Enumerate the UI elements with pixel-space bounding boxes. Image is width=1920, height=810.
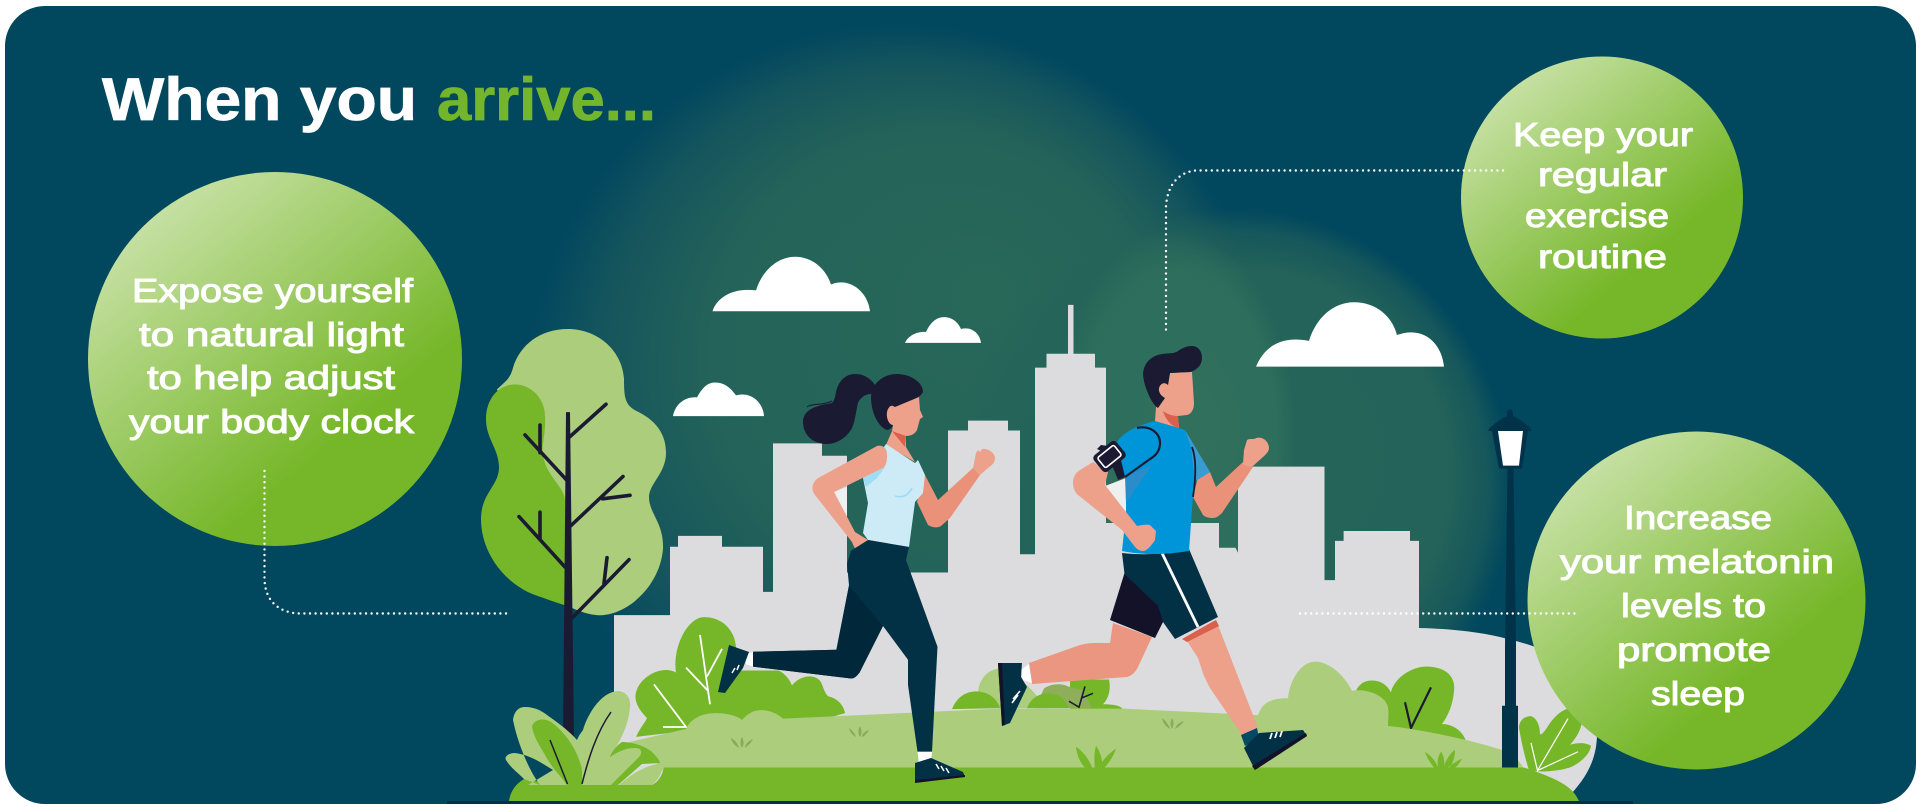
man shirt: [1112, 421, 1210, 554]
circle: melatonin: promote: [1617, 631, 1771, 668]
woman hair: [803, 374, 923, 444]
man hair: [1143, 346, 1202, 408]
woman far arm: [917, 468, 980, 527]
man near leg: [1187, 620, 1258, 735]
title: When you: [102, 66, 417, 133]
woman feet: [745, 652, 932, 764]
circle: melatonin: levels to: [1621, 587, 1766, 624]
title: [102, 66, 656, 133]
background glow: [561, 42, 1502, 630]
circle: natural light: to natural light: [139, 316, 404, 353]
circle: melatonin: sleep: [1651, 675, 1745, 712]
man fist: [1243, 438, 1269, 467]
woman neck and face: [886, 397, 923, 462]
woman arm gap: [834, 487, 847, 516]
right bottom leaves: [1519, 708, 1591, 772]
circle: exercise: regular: [1538, 156, 1667, 193]
circle: natural light: [88, 172, 462, 546]
man neck and face: [1155, 372, 1194, 428]
man armband and phone: [1092, 427, 1160, 480]
small bushes behind man: [952, 669, 1123, 709]
dotted connector: natural light: [264, 471, 507, 614]
woman fist: [973, 449, 995, 475]
circle: melatonin: Increase: [1624, 499, 1772, 536]
man near arm: [1073, 462, 1156, 551]
clouds: [673, 257, 1444, 416]
ground shadow line: [447, 801, 1633, 804]
title: arrive...: [437, 66, 656, 133]
runner: man: [998, 346, 1307, 770]
circle: exercise: routine: [1538, 238, 1667, 275]
bush behind runner: [635, 617, 845, 737]
man far leg: [1029, 623, 1152, 684]
circle: exercise: Keep your: [1513, 116, 1693, 153]
circle: natural light: Expose yourself: [132, 272, 414, 309]
hill: [626, 662, 1525, 771]
circle: melatonin: [1528, 432, 1866, 770]
circle: exercise: exercise: [1525, 197, 1669, 234]
man feet: [1241, 728, 1259, 746]
man far arm: [1193, 462, 1253, 518]
circle: natural light: to help adjust: [147, 359, 395, 396]
man white gap: [1105, 478, 1126, 513]
lamp post: [1489, 409, 1531, 780]
park scene background: [481, 257, 1597, 800]
dotted connector: melatonin: [1300, 612, 1580, 615]
ground: [509, 768, 1579, 801]
runner: woman: [718, 374, 995, 783]
circle: melatonin: your melatonin: [1560, 543, 1834, 580]
circle: natural light: your body clock: [129, 403, 415, 440]
city skyline: [614, 305, 1597, 800]
man shorts: [1110, 573, 1163, 638]
circle: exercise: [1461, 56, 1743, 338]
woman near arm: [812, 446, 887, 552]
tree: [481, 329, 666, 741]
woman leggings: [753, 540, 938, 752]
right bush: [1356, 667, 1466, 741]
front left bush: [505, 691, 663, 785]
grass tufts: [731, 718, 1462, 770]
woman top: [863, 444, 925, 547]
dotted connector: exercise: [1166, 170, 1503, 331]
